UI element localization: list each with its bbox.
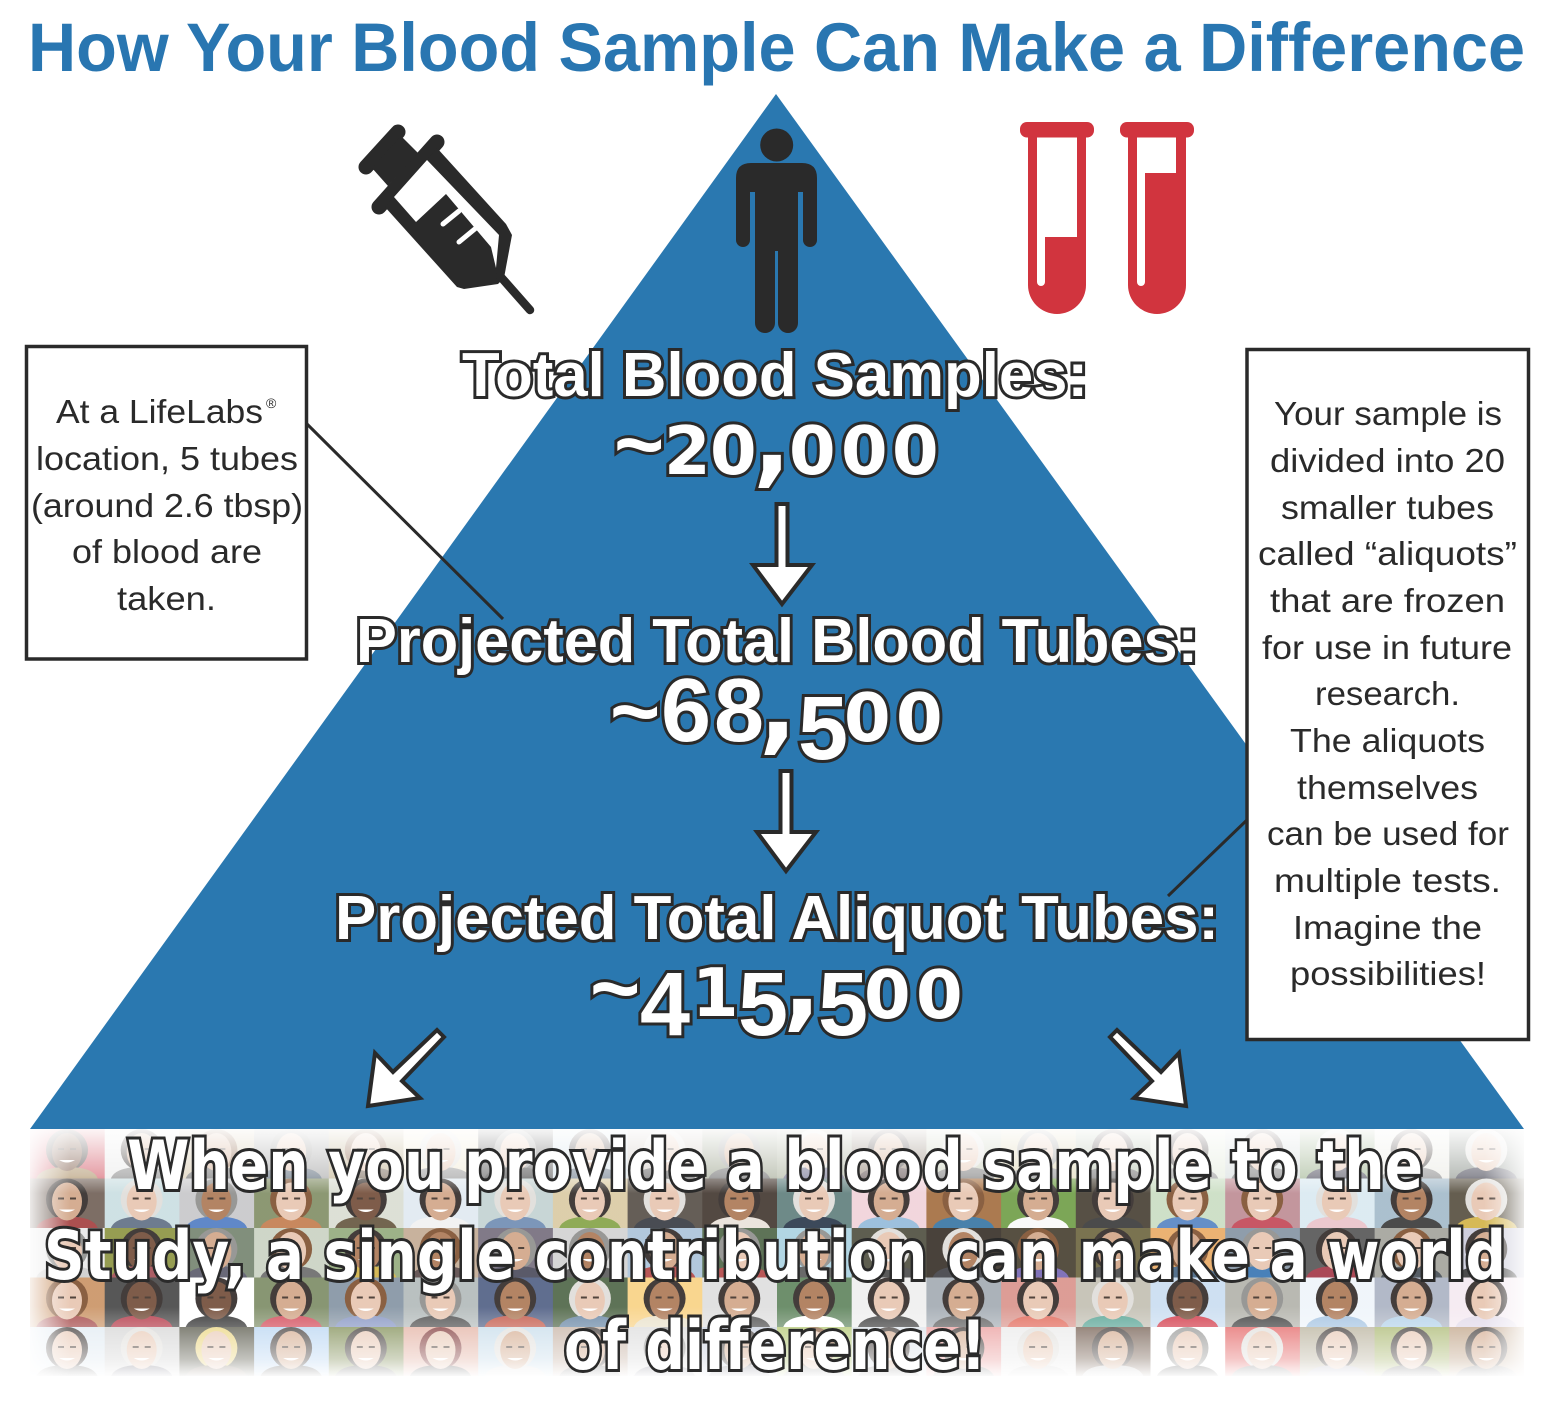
- callout: LifeLabs tubes: [26, 346, 306, 659]
- arrow: down left: [368, 1030, 444, 1106]
- callout: aliquots: divided into 20: [1270, 442, 1505, 479]
- pyramid: [30, 94, 1524, 1129]
- callout: aliquots: called “aliquots”: [1258, 535, 1517, 572]
- heading: projected total aliquot tubes: Projected Total Aliquot Tubes:: [335, 884, 1219, 953]
- faces row 5: [30, 1327, 1524, 1377]
- number: 20,000: 0: [892, 412, 939, 490]
- number: 68,500: 0: [844, 679, 891, 757]
- number: 20,000: ~: [614, 397, 664, 493]
- closing message: [44, 1127, 1506, 1386]
- number: 415,500: ~: [590, 941, 640, 1037]
- number: 68,500: 8: [714, 661, 764, 761]
- number: 20,000: ,: [753, 381, 791, 498]
- callout: aliquots: themselves: [1297, 769, 1478, 806]
- callout: aliquots: that are frozen: [1270, 582, 1505, 619]
- number: 415,500: 0: [916, 956, 963, 1034]
- number: 20,000: 0: [789, 412, 836, 490]
- number: 68,500: ,: [759, 648, 797, 765]
- number: 415,500: 4: [640, 955, 690, 1055]
- number: 20,000: 0: [841, 412, 888, 490]
- faces row 2: [30, 1178, 1524, 1228]
- icon: test tube with high level: [1120, 122, 1194, 314]
- icon: person: [736, 128, 817, 333]
- icon: syringe: [366, 132, 530, 310]
- number: 68,500: 5: [798, 679, 848, 779]
- title: How Your Blood Sample Can Make a Difference: [28, 9, 1525, 86]
- faces row 3: [30, 1228, 1524, 1278]
- faces row 1: [30, 1129, 1524, 1179]
- callout: aliquots: Imagine the: [1293, 909, 1482, 946]
- photo strip of faces: [30, 1129, 1524, 1377]
- callout: aliquots: smaller tubes: [1281, 489, 1494, 526]
- number: 415,500: 5: [738, 955, 788, 1055]
- callout: aliquots: for use in future: [1262, 629, 1512, 666]
- heading: total blood samples: Total Blood Samples:: [462, 341, 1088, 410]
- callout: aliquots: possibilities!: [1290, 955, 1486, 992]
- faces row 4: [30, 1278, 1524, 1328]
- number: 20,000: 0: [710, 412, 757, 490]
- closing message: of difference!: [564, 1307, 986, 1386]
- heading: projected total blood tubes: Projected Total Blood Tubes:: [356, 607, 1198, 676]
- arrow: tubes to aliquots: [757, 771, 816, 871]
- callout: aliquots: can be used for: [1267, 815, 1509, 852]
- callout: aliquots: multiple tests.: [1274, 862, 1501, 899]
- number: 415,500: ,: [783, 925, 821, 1042]
- number: 20,000: 2: [664, 412, 711, 490]
- number: 68,500: 6: [661, 661, 711, 761]
- callout: aliquots: The aliquots: [1290, 722, 1485, 759]
- icon: test tube with low level: [1020, 122, 1094, 314]
- callout: LifeLabs tubes: location, 5 tubes: [36, 440, 298, 477]
- number: 415,500: 1: [692, 954, 739, 1032]
- number: 68,500: 0: [896, 679, 943, 757]
- callout: aliquots: research.: [1315, 675, 1460, 712]
- arrow: down right: [1110, 1030, 1186, 1106]
- arrow: samples to tubes: [753, 504, 812, 604]
- number: 68,500: ~: [610, 664, 660, 760]
- leader line: right box: [1168, 819, 1248, 896]
- callout: aliquots: Your sample is: [1274, 395, 1502, 432]
- callout: LifeLabs tubes: (around 2.6 tbsp): [31, 487, 303, 524]
- callout: LifeLabs tubes: of blood are: [72, 533, 262, 570]
- callout: aliquots: [1247, 350, 1528, 1040]
- number: 415,500: 5: [818, 955, 868, 1055]
- callout: LifeLabs tubes: taken.: [117, 580, 216, 617]
- callout: LifeLabs tubes: ®: [266, 395, 277, 411]
- number: 415,500: 0: [864, 956, 911, 1034]
- leader line: left box: [307, 424, 503, 619]
- callout: LifeLabs tubes: At a LifeLabs: [56, 393, 263, 430]
